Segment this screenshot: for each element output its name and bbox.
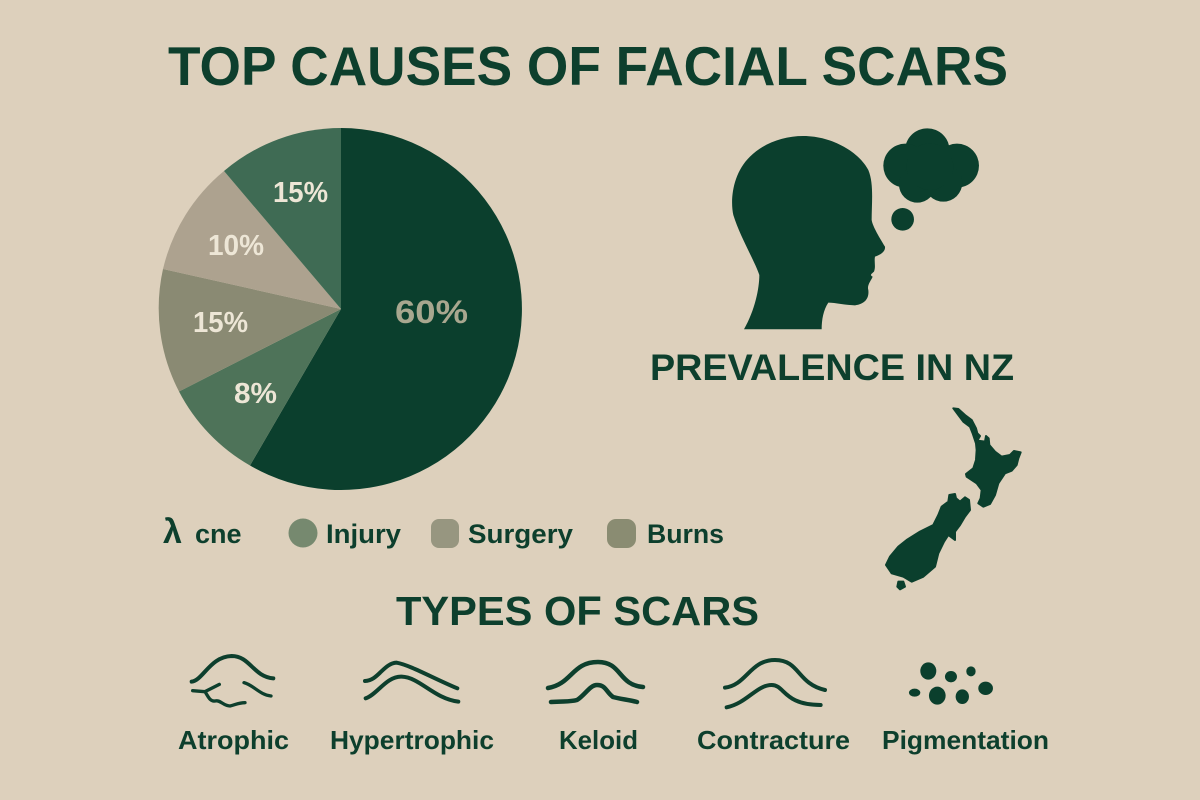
- label: Atrophic: Atrophic: [178, 725, 289, 755]
- legend label: Burns: Burns: [647, 519, 724, 549]
- label: Pigmentation: Pigmentation: [882, 725, 1049, 755]
- scar type: Contracture: [697, 660, 850, 755]
- pie chart: causes: [159, 128, 522, 490]
- slice: 60%: [250, 128, 522, 490]
- label: upper 15%: 15%: [273, 177, 328, 209]
- slice: 8%: [179, 309, 341, 466]
- legend marker: Surgery: [431, 519, 459, 548]
- scar type: Hypertrophic: [330, 663, 494, 755]
- icon: atrophic scar: [192, 656, 273, 706]
- legend marker: Injury: [288, 518, 318, 548]
- icon: head with thought cloud: [732, 128, 979, 329]
- label: Keloid: Keloid: [559, 725, 638, 755]
- legend item: Acne: λ: [163, 513, 182, 551]
- title: TOP CAUSES OF FACIAL SCARS: [168, 35, 1008, 97]
- scar type: Pigmentation: [882, 662, 1049, 755]
- slice: 15% upper: [224, 128, 341, 309]
- label: 8%: 8%: [234, 378, 277, 410]
- thought bubble dot: [891, 208, 914, 231]
- slice: 10%: [163, 171, 341, 309]
- South Island: [886, 494, 970, 582]
- Stewart Island: [897, 582, 905, 589]
- label: Hypertrophic: Hypertrophic: [330, 725, 494, 755]
- legend label: Surgery: Surgery: [468, 519, 573, 549]
- legend marker: Burns: [607, 519, 636, 548]
- map: New Zealand: [886, 408, 1021, 589]
- icon: keloid scar: [548, 662, 643, 702]
- legend label: Injury: Injury: [326, 519, 401, 549]
- North Island: [953, 408, 1021, 507]
- label: 60%: 60%: [395, 294, 468, 330]
- legend item: Acne: cne: [195, 519, 242, 549]
- label: Contracture: Contracture: [697, 725, 850, 755]
- icon: hypertrophic scar: [365, 663, 458, 702]
- thought cloud: [883, 128, 979, 203]
- legend: [163, 513, 724, 551]
- heading: types of scars: TYPES OF SCARS: [396, 588, 759, 634]
- label: lower 15%: 15%: [193, 307, 248, 339]
- scar type: Atrophic: [178, 656, 289, 755]
- slice: 15%: [159, 269, 341, 392]
- icon: pigmentation dots: [909, 662, 993, 705]
- icon: contracture scar: [725, 660, 825, 707]
- heading: prevalence in NZ: PREVALENCE IN NZ: [650, 347, 1014, 388]
- label: 10%: 10%: [208, 230, 264, 262]
- head silhouette: [732, 136, 885, 329]
- scar type: Keloid: [548, 662, 643, 755]
